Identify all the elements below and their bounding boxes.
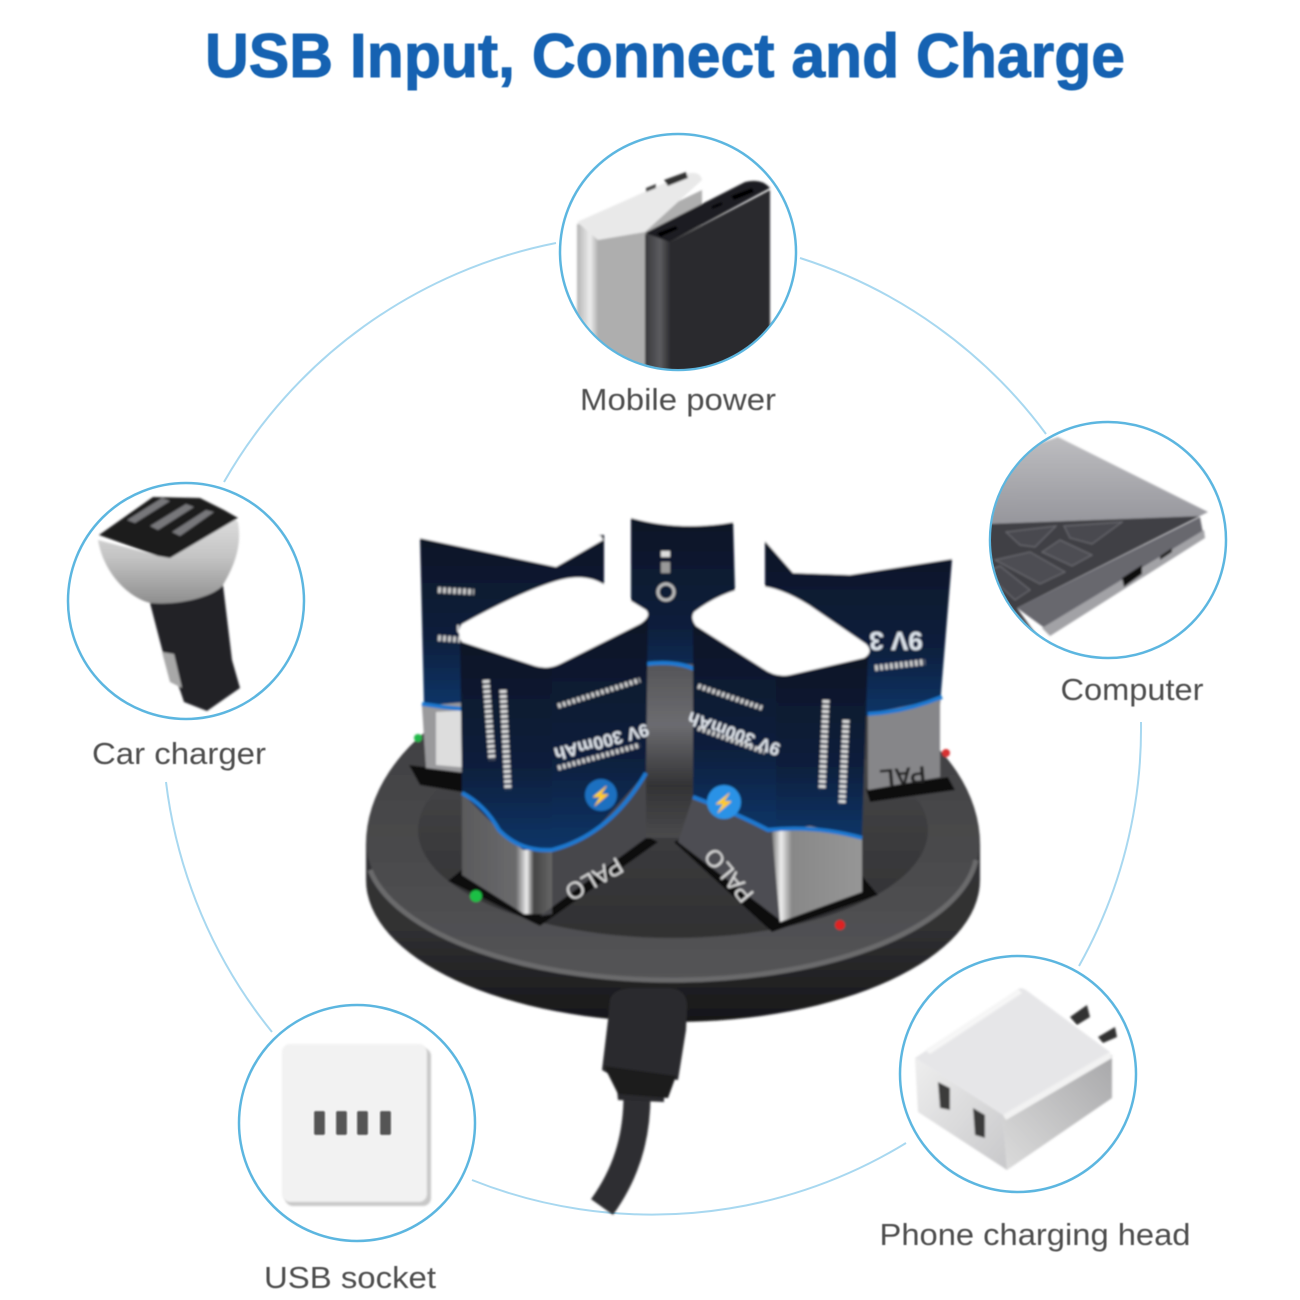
label: mobile power: Mobile power: [580, 382, 776, 417]
product: charger with five batteries: [366, 448, 980, 1207]
front left battery: [459, 577, 651, 916]
front right battery: [678, 586, 870, 922]
title: USB Input, Connect and Charge: [205, 22, 1125, 91]
label: phone charging head: Phone charging head: [880, 1217, 1190, 1252]
label: usb socket: USB socket: [264, 1260, 436, 1295]
back center battery: [631, 448, 738, 838]
node: usb socket: [239, 1005, 475, 1241]
front right battery: 9V 300mAh: [685, 708, 783, 760]
front left battery: PALO: [560, 851, 627, 906]
label: car charger: Car charger: [92, 736, 266, 771]
front left battery: ⚡: [590, 785, 612, 807]
charger base: [366, 653, 980, 1022]
slots: [448, 790, 658, 926]
connection ring: [166, 243, 1141, 1215]
front left battery: 9V 300mAh: [552, 720, 651, 764]
node: car charger: [68, 483, 304, 719]
back right battery: [764, 505, 952, 791]
usb cable: [602, 988, 687, 1207]
node: mobile power: [560, 134, 796, 384]
node: phone charging head: [900, 956, 1136, 1192]
back right battery: 9V 3: [869, 626, 923, 656]
back left battery: 4Vh: [456, 621, 484, 638]
back right battery: PAL: [878, 760, 927, 791]
node: computer: [985, 422, 1226, 658]
front right battery: PALO: [699, 842, 760, 907]
status lights: [414, 734, 950, 930]
front right battery: ⚡: [713, 792, 735, 814]
back left battery: [419, 495, 604, 790]
label: computer: Computer: [1060, 672, 1204, 707]
